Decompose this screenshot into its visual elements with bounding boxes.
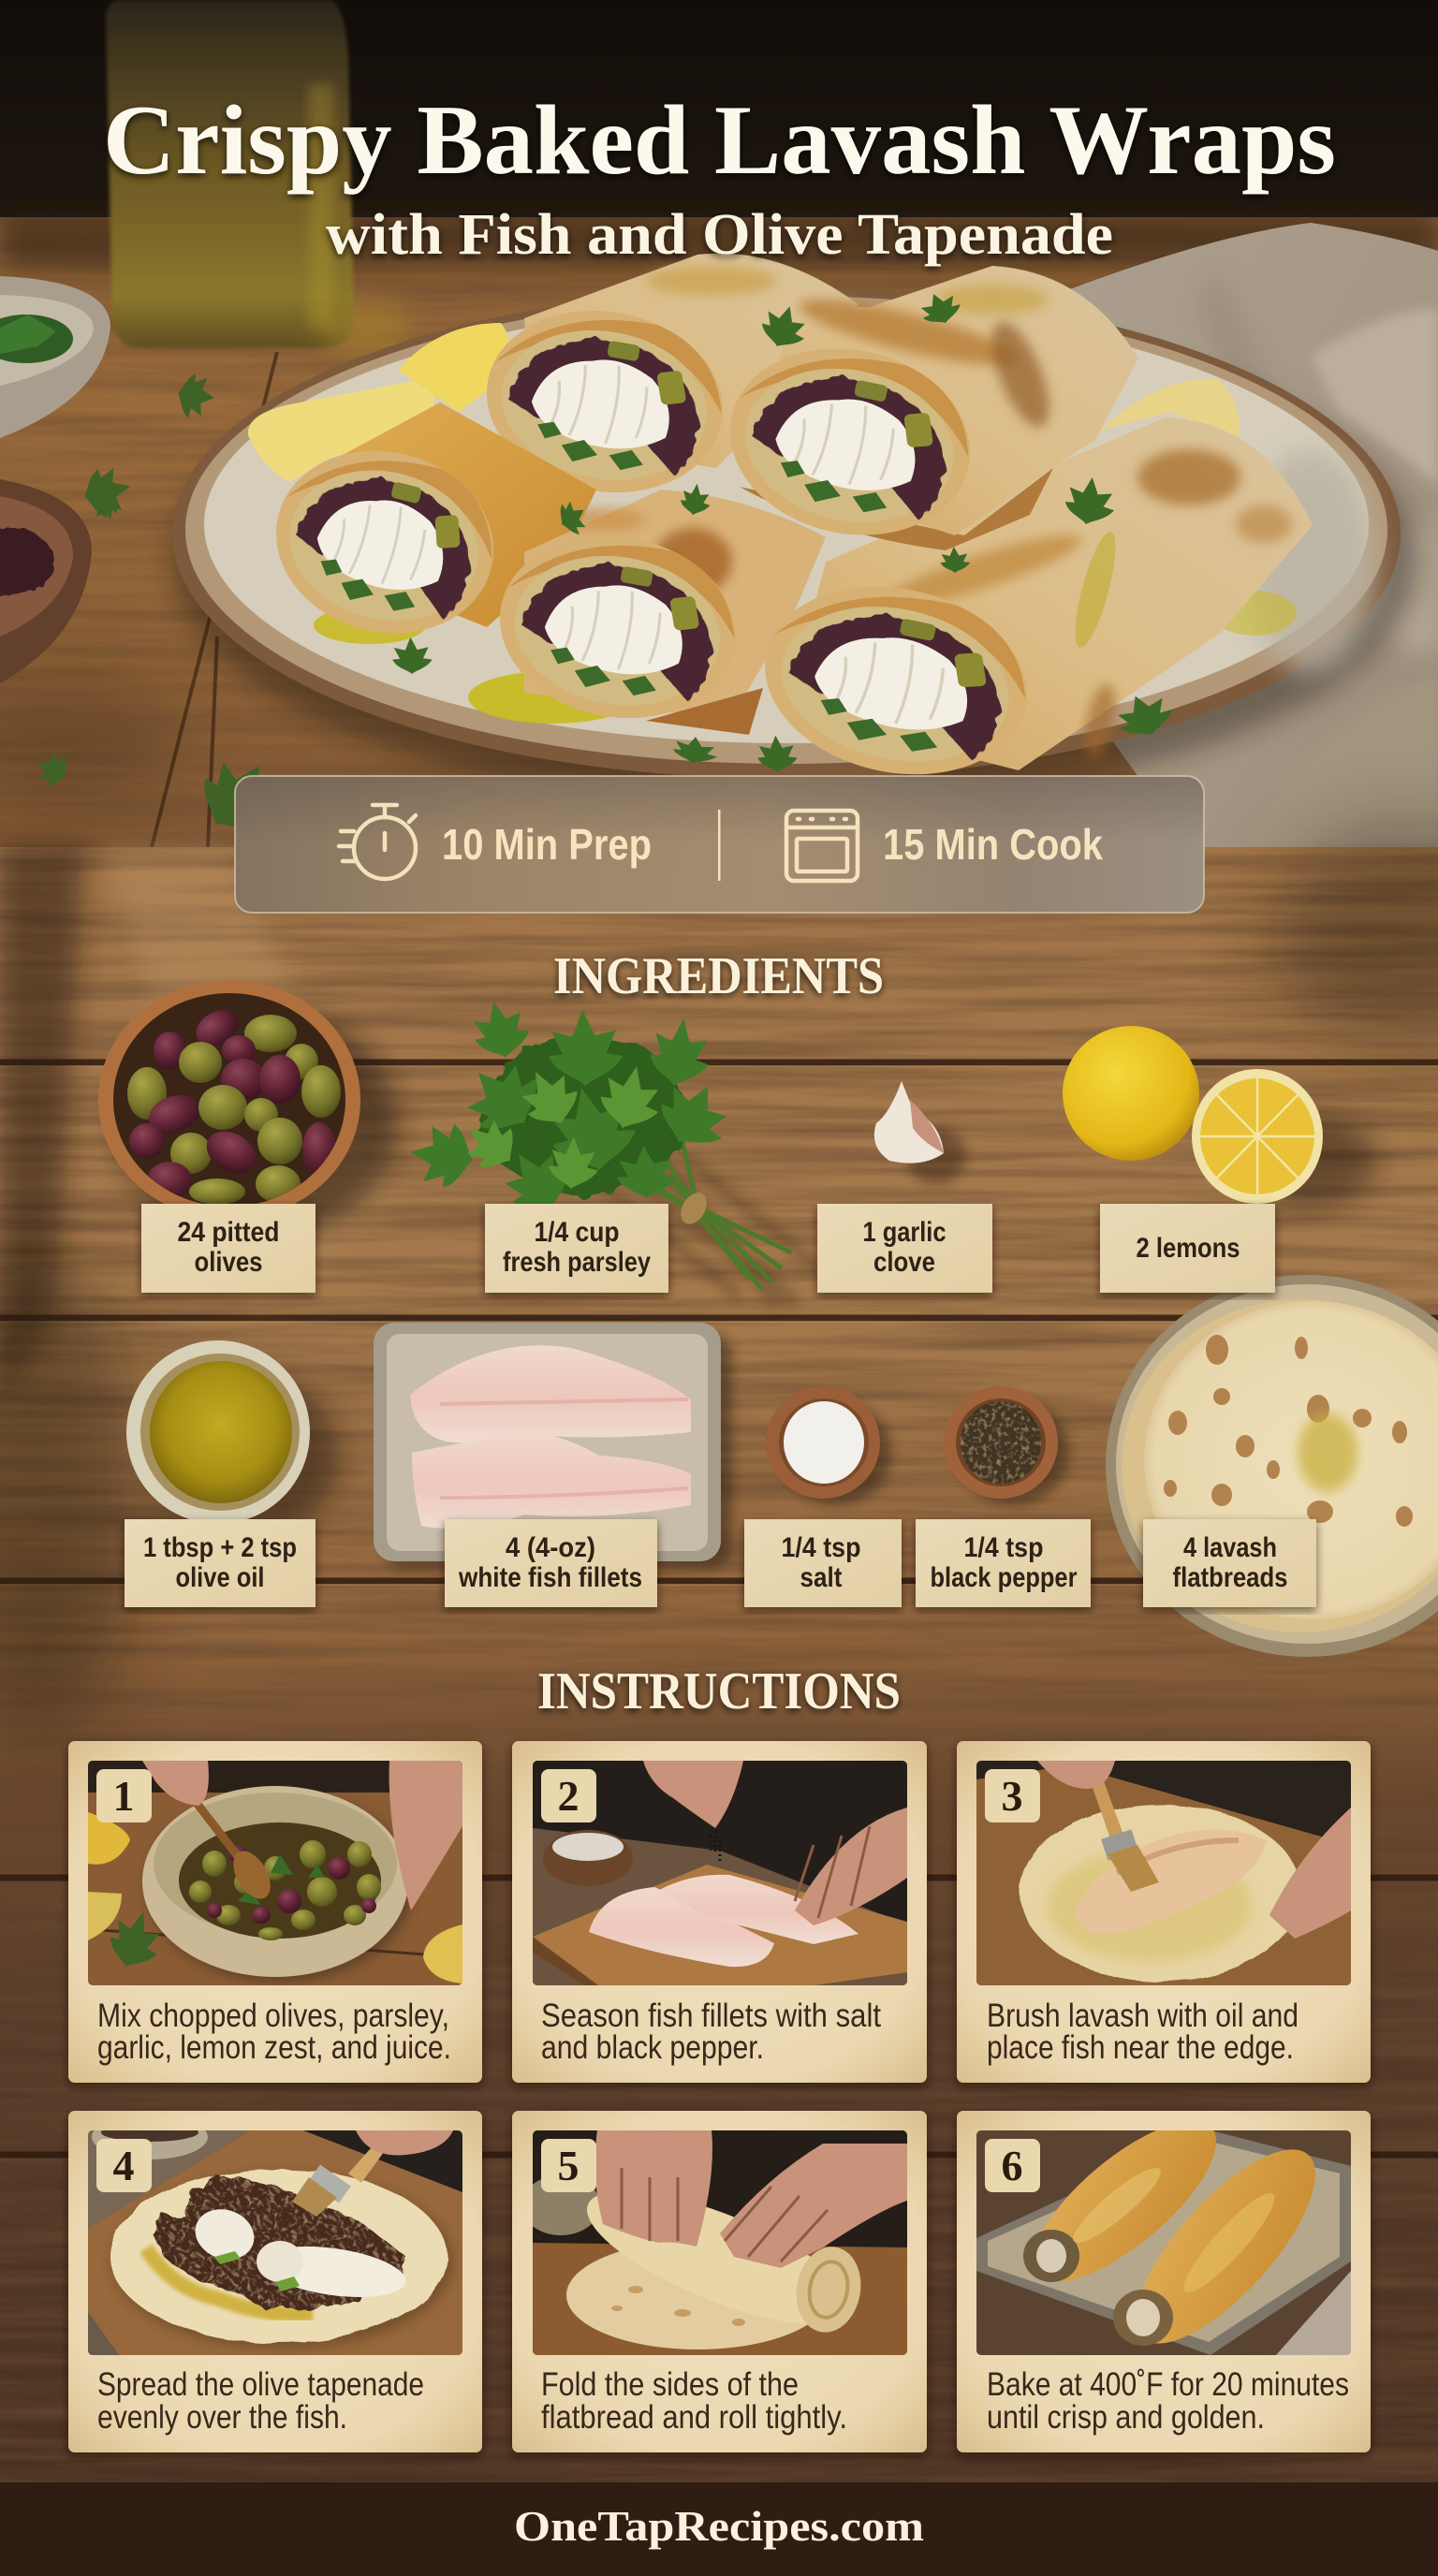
step text: flatbread and roll tightly. [541, 2399, 847, 2436]
text: cook time: 15 Min Cook [883, 820, 1103, 869]
panel: step 5 [512, 2111, 927, 2452]
step text [541, 1998, 881, 2066]
olive oil bottle [106, 0, 412, 354]
step text: garlic, lemon zest, and juice. [97, 2029, 451, 2066]
label: lavash: 4 lavash [1183, 1532, 1277, 1563]
divider [718, 810, 721, 881]
panel: step 1 [68, 1741, 482, 2083]
badge: 2: 2 [558, 1772, 579, 1820]
ingredient: salt bowl [766, 1386, 891, 1505]
step text: and black pepper. [541, 2029, 764, 2066]
badge: 2 [541, 1769, 596, 1822]
wooden table [0, 211, 1438, 847]
step text [97, 1998, 451, 2066]
photo: seasoning fish [533, 1761, 907, 1985]
label: pepper [916, 1519, 1091, 1607]
label: parsley: 1/4 cup [534, 1217, 620, 1248]
label: garlic [817, 1204, 992, 1293]
badge: 6: 6 [1002, 2142, 1022, 2189]
photo: mixing tapenade [88, 1761, 462, 1985]
label: olives [141, 1204, 315, 1293]
label: parsley: fresh parsley [503, 1247, 651, 1278]
label: olive oil: olive oil [176, 1562, 264, 1593]
badge: 6 [985, 2139, 1040, 2192]
dark back wall [0, 0, 1438, 225]
ingredient: parsley bunch [405, 996, 817, 1306]
photo: baked wraps on tray [976, 2130, 1351, 2355]
panel: step 2 [512, 1741, 927, 2083]
title: Crispy Baked Lavash Wraps [103, 85, 1336, 195]
step text: evenly over the fish. [97, 2399, 347, 2436]
label: fish: 4 (4-oz) [506, 1532, 595, 1563]
ingredient: pepper bowl [944, 1386, 1069, 1505]
heading: ingredients: INGREDIENTS [553, 947, 884, 1005]
badge: 3 [985, 1769, 1040, 1822]
wrap: front middle [485, 490, 826, 737]
badge: 4 [96, 2139, 152, 2192]
ingredient: garlic clove [874, 1081, 966, 1184]
label: garlic: clove [873, 1247, 935, 1278]
ingredient labels row 1 [141, 1204, 1275, 1293]
text: prep time: 10 Min Prep [442, 820, 652, 869]
step text [97, 2366, 424, 2436]
badge: 3: 3 [1002, 1772, 1022, 1820]
step text: place fish near the edge. [987, 2029, 1294, 2066]
label: salt [744, 1519, 902, 1607]
label: fish [445, 1519, 657, 1607]
step text: Bake at 400˚F for 20 minutes [987, 2366, 1349, 2403]
label: olive oil: 1 tbsp + 2 tsp [143, 1532, 297, 1563]
wood planks background [0, 824, 1438, 2485]
label: lemons [1100, 1204, 1275, 1293]
ingredient: fish fillets on tray [374, 1323, 732, 1568]
small bowl of herbs [0, 276, 110, 438]
label: pepper: black pepper [931, 1562, 1078, 1593]
table herb sprigs [30, 372, 291, 848]
small bowl of tapenade [0, 479, 92, 683]
subtitle: with Fish and Olive Tapenade [326, 203, 1113, 267]
label: garlic: 1 garlic [863, 1217, 946, 1248]
badge: 5 [541, 2139, 596, 2192]
step text [987, 1998, 1299, 2066]
panel: step 6 [957, 2095, 1371, 2452]
label: salt: salt [800, 1562, 843, 1593]
step text: Season fish fillets with salt [541, 1998, 881, 2034]
label: salt: 1/4 tsp [781, 1532, 861, 1563]
wrap: top right [712, 266, 1138, 557]
panel: step 4 [68, 2111, 482, 2452]
ingredient labels row 2 [125, 1519, 1316, 1607]
photo: rolling flatbread [521, 2130, 907, 2355]
time bar [235, 776, 1204, 913]
step text [541, 2366, 847, 2436]
label: olives: 24 pitted [178, 1217, 279, 1248]
ingredient: lemons [1063, 1026, 1376, 1208]
step text: Brush lavash with oil and [987, 1998, 1299, 2034]
wrap: top back [472, 254, 858, 511]
step text: Spread the olive tapenade [97, 2366, 424, 2403]
hero photo: wraps on a plate [0, 0, 1438, 848]
ingredient: lavash flatbreads [1106, 1275, 1438, 1657]
olive oil drizzle [314, 591, 1297, 724]
icon: oven [786, 811, 858, 881]
step text: Fold the sides of the [541, 2366, 799, 2403]
badge: 1 [96, 1769, 152, 1822]
wrap: left [257, 402, 596, 655]
label: olives: olives [195, 1247, 262, 1278]
photo: spreading tapenade [88, 2115, 462, 2355]
wrap: front right large [747, 417, 1313, 798]
photo: brushing lavash [976, 1761, 1351, 1985]
label: fish: white fish fillets [458, 1562, 642, 1593]
parsley garnish [392, 286, 1178, 772]
footer text: OneTapRecipes.com [514, 2502, 924, 2550]
label: lavash [1143, 1519, 1316, 1607]
label: lemons: 2 lemons [1137, 1233, 1240, 1264]
heading: instructions: INSTRUCTIONS [537, 1662, 901, 1720]
badge: 5: 5 [558, 2142, 579, 2189]
label: pepper: 1/4 tsp [964, 1532, 1043, 1563]
step text [987, 2366, 1349, 2436]
ingredient: olive oil bowl [126, 1340, 339, 1540]
panel: step 3 [957, 1741, 1371, 2083]
badge: 1: 1 [112, 1772, 135, 1820]
linen napkin [1067, 223, 1438, 847]
step text: Mix chopped olives, parsley, [97, 1998, 449, 2034]
label: olive oil [125, 1519, 315, 1607]
lemon wedges [248, 323, 1240, 482]
plate [172, 288, 1418, 807]
label: lavash: flatbreads [1172, 1562, 1288, 1593]
icon: stopwatch [339, 805, 416, 879]
footer [0, 2482, 1438, 2576]
label: parsley [485, 1204, 668, 1293]
step text: until crisp and golden. [987, 2399, 1265, 2436]
badge: 4: 4 [112, 2142, 135, 2189]
ingredient: olives in wooden bowl [98, 980, 398, 1240]
